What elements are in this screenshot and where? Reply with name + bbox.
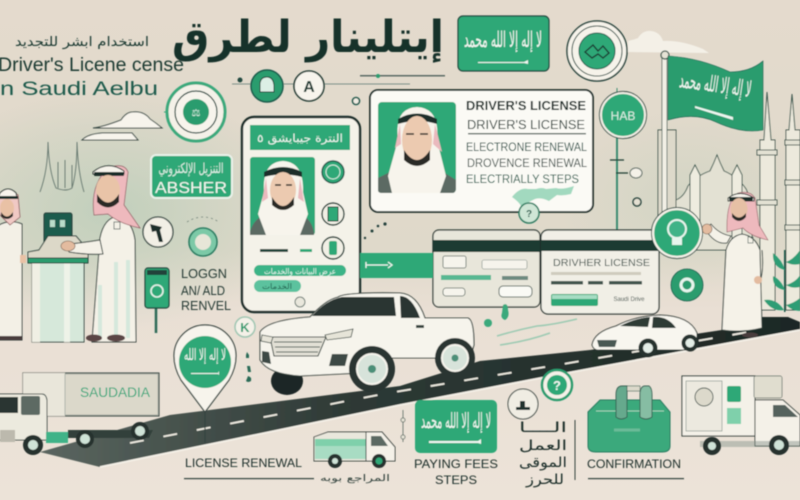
card text lines: DRIVER'S LICENSE bbox=[466, 98, 586, 113]
Arabic steps column: للحرز bbox=[525, 472, 564, 488]
icon: green bag bbox=[588, 386, 670, 452]
icon: machine circle bbox=[508, 389, 538, 419]
card green smudge bbox=[512, 186, 574, 206]
card bottom badge bbox=[519, 203, 539, 223]
flag of Saudi Arabia on pole bbox=[661, 51, 763, 233]
icon: HAB sign on pole: HAB bbox=[611, 109, 635, 123]
small flag: top: لا إله إلا الله محمد bbox=[464, 28, 542, 53]
icon: question mark circle bbox=[542, 370, 572, 400]
icon: HAB sign on pole bbox=[600, 88, 646, 230]
card text lines: ELECTRIALLY STEPS bbox=[466, 174, 579, 186]
small blobs below card bbox=[484, 304, 577, 345]
road bbox=[40, 317, 800, 467]
Arabic steps column: الموقى bbox=[519, 455, 567, 471]
icon: small parking meter bbox=[145, 268, 169, 333]
card right: Saudi Drive bbox=[613, 297, 645, 303]
label: license renewal: المراجع بوبه bbox=[320, 474, 390, 484]
card right bbox=[541, 230, 659, 314]
icon row: document and letter A bbox=[232, 70, 410, 104]
card text lines bbox=[466, 98, 588, 186]
mosque skyline bbox=[658, 92, 800, 310]
text: login and renewal: LOGGN bbox=[181, 267, 227, 281]
label: license renewal bbox=[184, 458, 390, 484]
label: license renewal: LICENSE RENEWAL bbox=[185, 458, 303, 470]
card right: DRIVHER LICENSE bbox=[553, 257, 650, 269]
phone portrait bbox=[250, 157, 315, 235]
text: login and renewal: RENVEL bbox=[181, 299, 231, 313]
map pin with flag: لا إله إلا الله bbox=[184, 345, 226, 364]
label: confirmation bbox=[587, 457, 684, 479]
icon: refresh circle bbox=[671, 269, 703, 301]
flag card: paying fees bbox=[415, 400, 497, 453]
label: paying fees steps: PAYING FEES bbox=[414, 457, 498, 471]
panel: license cards bbox=[433, 230, 659, 314]
badge: ABSHER bbox=[151, 155, 232, 198]
plant bbox=[764, 250, 800, 312]
subtitle: Driver's License in Saudi Arabia: استخدام ابشر للتجديد bbox=[15, 35, 149, 50]
icon: K badge: K bbox=[240, 320, 250, 335]
card text lines: ELECTRONE RENEWAL bbox=[466, 142, 588, 154]
card left bbox=[433, 230, 540, 307]
arrow box between phone and cards bbox=[360, 253, 433, 278]
panel: large driver's license card bbox=[370, 90, 593, 223]
badge: ABSHER: ABSHER bbox=[155, 180, 227, 197]
minaret left bbox=[658, 118, 676, 232]
subtitle: Driver's License in Saudi Arabia: Driver's Licene cense bbox=[0, 55, 184, 76]
scattered dots near phone bbox=[364, 222, 387, 239]
subtitle: Driver's License in Saudi Arabia bbox=[0, 35, 184, 100]
decorative tower outline bbox=[40, 142, 84, 192]
icon: K badge bbox=[235, 317, 255, 337]
small flag: top bbox=[458, 16, 549, 71]
Arabic steps column: الــــا bbox=[519, 420, 567, 436]
minaret middle bbox=[760, 92, 775, 310]
delivery truck: Saudia bbox=[0, 373, 159, 455]
phone with Absher app bbox=[242, 117, 360, 312]
sedan car bbox=[592, 315, 698, 358]
card bottom badge: ? bbox=[526, 209, 532, 220]
text: لا إله إلا الله محمد bbox=[421, 409, 491, 434]
badge: ABSHER: التنزيل الإلكتروني bbox=[158, 161, 224, 177]
phone header bbox=[250, 125, 350, 150]
map pin with flag bbox=[174, 325, 236, 443]
title: Arabic heading: إيتلينار لطرق bbox=[172, 12, 444, 63]
icon: round seal badge bbox=[164, 83, 226, 141]
icon: round emblem top right bbox=[567, 21, 627, 81]
phone buttons: الخدمات bbox=[262, 282, 292, 291]
label: paying fees steps bbox=[414, 457, 498, 487]
figure: man at left edge bbox=[0, 189, 26, 340]
text: login and renewal: AN/ ALD bbox=[181, 284, 225, 298]
card text lines: DRIVER'S LICENSE bbox=[467, 117, 585, 132]
small marks near pin bbox=[246, 352, 251, 382]
text: login and renewal bbox=[181, 267, 231, 313]
phone header: النترة جيبايشق ٥ bbox=[257, 132, 343, 146]
dotted connector at left of flag card bbox=[401, 410, 405, 442]
minaret right bbox=[786, 94, 800, 310]
icon row: document and letter A: A bbox=[303, 79, 315, 96]
pickup vehicle bbox=[260, 293, 475, 395]
Arabic steps column bbox=[519, 420, 575, 488]
cloud right bbox=[628, 31, 709, 53]
clouds left bbox=[82, 112, 162, 140]
icon: green headset circle bbox=[187, 217, 219, 256]
phone home button bbox=[295, 297, 305, 307]
phone side icons bbox=[322, 161, 344, 259]
figure: man by the road bbox=[702, 192, 768, 338]
label: paying fees steps: STEPS bbox=[435, 473, 477, 487]
icon: wrench circle bbox=[143, 217, 173, 247]
icon: round seal badge: ⚖ bbox=[192, 108, 201, 119]
icon: question mark circle: ? bbox=[553, 378, 561, 393]
small green truck bbox=[314, 432, 395, 468]
subtitle: Driver's License in Saudi Arabia: n Saudi Aelbu bbox=[0, 79, 158, 100]
icon: lightbulb circle bbox=[652, 208, 702, 258]
phone buttons: عرض البيانات والخدمات bbox=[264, 267, 336, 276]
Arabic steps column: العمل bbox=[519, 438, 567, 454]
card portrait bbox=[378, 102, 456, 193]
figure: man using kiosk bbox=[61, 166, 140, 342]
phone status dashes bbox=[260, 249, 312, 252]
kiosk machine bbox=[28, 213, 88, 342]
delivery truck: confirmation bbox=[682, 376, 800, 455]
label: confirmation: CONFIRMATION bbox=[587, 457, 681, 471]
phone buttons bbox=[254, 265, 346, 292]
card text lines: DROVENCE RENEWAL bbox=[467, 158, 588, 170]
delivery truck: Saudia: SAUDADIA bbox=[80, 385, 150, 400]
